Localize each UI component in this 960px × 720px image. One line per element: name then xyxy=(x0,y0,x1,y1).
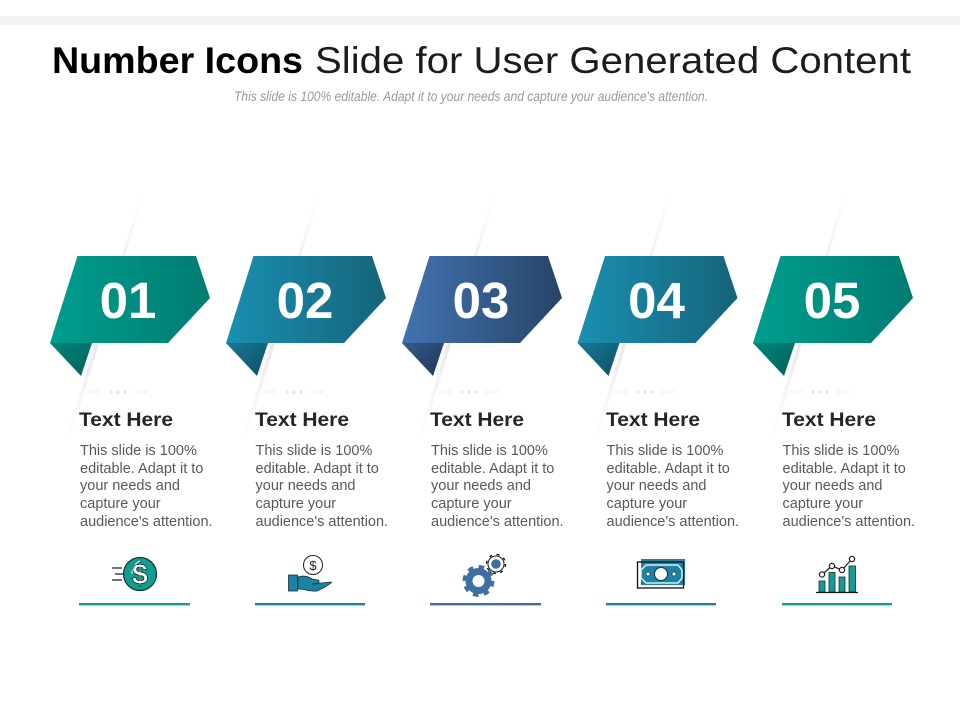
separator dots: »»» xyxy=(310,387,324,396)
icon: dollar coin xyxy=(112,558,156,591)
underline xyxy=(782,603,892,605)
heading: Text Here xyxy=(782,409,876,431)
body text: audience's attention. xyxy=(80,514,213,530)
body text xyxy=(782,443,915,530)
underline xyxy=(79,603,190,605)
body text: audience's attention. xyxy=(431,514,564,530)
heading: Text Here xyxy=(79,409,173,431)
separator dots: ««« xyxy=(789,387,803,396)
body text: your needs and xyxy=(431,478,531,494)
body text: editable. Adapt it to xyxy=(431,461,554,477)
banner 03 xyxy=(402,256,562,376)
icon: hand with coin: $ xyxy=(309,558,317,573)
body text xyxy=(256,443,388,530)
body text: capture your xyxy=(431,496,512,512)
title: Number Icons xyxy=(52,40,303,81)
body text xyxy=(80,443,213,530)
banner 04 xyxy=(578,256,738,376)
icon: gears xyxy=(464,554,506,595)
separator dots xyxy=(87,387,148,396)
separator dots xyxy=(789,387,850,396)
separator dots: »»» xyxy=(485,387,499,396)
separator dots: »»» xyxy=(836,387,850,396)
separator dots xyxy=(438,387,499,396)
underline xyxy=(430,603,541,605)
body text: capture your xyxy=(782,496,863,512)
heading: Text Here xyxy=(430,409,524,431)
body text: editable. Adapt it to xyxy=(256,461,379,477)
separator dots: ««« xyxy=(87,387,101,396)
body text: This slide is 100% xyxy=(80,443,197,459)
body text: your needs and xyxy=(606,478,706,494)
subtitle: This slide is 100% editable. Adapt it to your needs and capture your audience's attention. xyxy=(234,89,708,104)
body text xyxy=(606,443,739,530)
separator dots: »»» xyxy=(134,387,148,396)
separator dots xyxy=(614,387,675,396)
body text: audience's attention. xyxy=(782,514,915,530)
step 3 xyxy=(402,193,564,605)
title: Slide for User Generated Content xyxy=(315,40,912,81)
top bar xyxy=(0,16,960,25)
banner 03: 03 xyxy=(453,272,509,329)
icon: bar chart xyxy=(816,556,858,592)
body text: your needs and xyxy=(80,478,180,494)
body text: editable. Adapt it to xyxy=(782,461,906,477)
banner 05: 05 xyxy=(804,272,860,329)
step 4 xyxy=(578,193,739,605)
banner 01: 01 xyxy=(100,272,156,329)
banner 04: 04 xyxy=(628,272,685,329)
body text: capture your xyxy=(80,496,161,512)
heading: Text Here xyxy=(255,409,349,431)
body text: audience's attention. xyxy=(606,514,739,530)
separator dots xyxy=(263,387,324,396)
body text: This slide is 100% xyxy=(782,443,899,459)
body text xyxy=(431,443,564,530)
banner 02 xyxy=(226,256,386,376)
underline xyxy=(255,603,365,605)
step 2 xyxy=(226,193,388,605)
separator dots: »»» xyxy=(661,387,675,396)
heading: Text Here xyxy=(606,409,700,431)
underline xyxy=(606,603,716,605)
separator dots: ««« xyxy=(263,387,277,396)
icon: banknote xyxy=(638,559,685,588)
body text: This slide is 100% xyxy=(431,443,548,459)
body text: audience's attention. xyxy=(256,514,388,530)
separator dots: ««« xyxy=(614,387,628,396)
body text: capture your xyxy=(256,496,336,512)
body text: capture your xyxy=(606,496,687,512)
separator dots: ««« xyxy=(438,387,452,396)
body text: editable. Adapt it to xyxy=(606,461,730,477)
body text: your needs and xyxy=(256,478,355,494)
step 1 xyxy=(50,193,213,605)
banner 05 xyxy=(753,256,913,376)
step 5 xyxy=(753,193,915,605)
banner 02: 02 xyxy=(277,272,333,329)
icon: dollar coin: $ xyxy=(132,559,148,591)
body text: editable. Adapt it to xyxy=(80,461,203,477)
icon: hand with coin xyxy=(288,556,331,591)
title xyxy=(52,40,912,81)
banner 01 xyxy=(50,256,210,376)
body text: This slide is 100% xyxy=(256,443,372,459)
body text: This slide is 100% xyxy=(606,443,723,459)
body text: your needs and xyxy=(782,478,882,494)
